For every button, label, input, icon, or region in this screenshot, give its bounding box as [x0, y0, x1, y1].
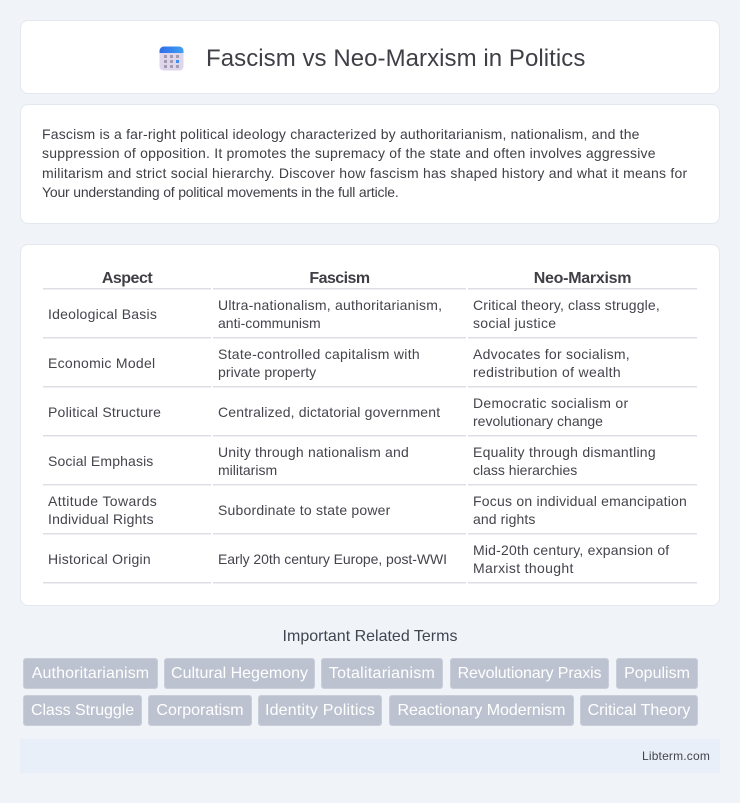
footer credit: Libterm.com: [642, 749, 710, 763]
row: Economic Model: Economic Model: [48, 355, 155, 371]
row: Attitude Towards Individual Rights: Attitude Towards: [48, 493, 157, 509]
row: Ideological Basis: [48, 297, 660, 331]
title: Fascism vs Neo-Marxism in Politics: [206, 45, 585, 72]
row: Social Emphasis: [48, 444, 656, 478]
row: Historical Origin: Early 20th century Europe, post-WWI: [218, 551, 447, 567]
panel: comparison table: [20, 244, 720, 606]
intro text: militarism and strict social hierarchy. Discover how fascism has shaped history and what it means for: [42, 165, 687, 181]
intro text: Fascism is a far-right political ideology characterized by authoritarianism, nationalism, and the: [42, 126, 640, 142]
row: Historical Origin: Historical Origin: [48, 551, 151, 567]
row: Economic Model: State-controlled capitalism with: [218, 346, 420, 362]
row: Political Structure: revolutionary change: [473, 413, 603, 429]
row: Attitude Towards Individual Rights: Individual Rights: [48, 511, 154, 527]
row: Social Emphasis: class hierarchies: [473, 462, 577, 478]
tag group: related terms: Authoritarianism: [32, 665, 149, 682]
row: Economic Model: [48, 346, 630, 380]
tag group: related terms: Cultural Hegemony: [171, 665, 308, 682]
row: Ideological Basis: Ultra-nationalism, authoritarianism,: [218, 297, 442, 313]
tag group: related terms: Revolutionary Praxis: [458, 665, 601, 682]
row: Economic Model: redistribution of wealth: [473, 364, 621, 380]
row: Historical Origin: Mid-20th century, expansion of: [473, 542, 669, 558]
row: Social Emphasis: Social Emphasis: [48, 453, 153, 469]
row: Social Emphasis: Unity through nationalism and: [218, 444, 409, 460]
row: Political Structure: [48, 395, 628, 429]
tag group: related terms: Totalitarianism: [329, 665, 435, 682]
row: Ideological Basis: social justice: [473, 315, 556, 331]
row: Historical Origin: Marxist thought: [473, 560, 574, 576]
row: Political Structure: Democratic socialism or: [473, 395, 628, 411]
tag group: related terms: [23, 658, 698, 726]
tag group: related terms: Populism: [624, 665, 690, 682]
panel: introduction: [20, 104, 720, 224]
row: Political Structure: Political Structure: [48, 404, 161, 420]
tag group: related terms: Reactionary Modernism: [398, 702, 565, 719]
row: Attitude Towards Individual Rights: Focus on individual emancipation: [473, 493, 687, 509]
tag group: related terms: Critical Theory: [588, 702, 690, 719]
row: Social Emphasis: militarism: [218, 462, 277, 478]
row: Economic Model: Advocates for socialism,: [473, 346, 630, 362]
heading: related terms: Important Related Terms: [283, 628, 457, 645]
row: Ideological Basis: Critical theory, class struggle,: [473, 297, 660, 313]
row: Ideological Basis: anti-communism: [218, 315, 321, 331]
table header: Aspect: [102, 270, 152, 287]
table header: Fascism: [309, 270, 370, 287]
row: Political Structure: Centralized, dictatorial government: [218, 404, 440, 420]
intro text: Your understanding of political movements in the full article.: [42, 184, 399, 200]
tag group: related terms: Class Struggle: [31, 702, 134, 719]
row: Attitude Towards Individual Rights: and rights: [473, 511, 535, 527]
row: Ideological Basis: Ideological Basis: [48, 306, 157, 322]
row: Historical Origin: [48, 542, 670, 576]
icon: calendar: [160, 46, 184, 70]
row: Social Emphasis: Equality through dismantling: [473, 444, 656, 460]
tag group: related terms: Identity Politics: [265, 702, 375, 719]
tag group: related terms: Corporatism: [156, 702, 244, 719]
table header: Neo-Marxism: [534, 270, 631, 287]
intro text: [42, 126, 687, 200]
table header: [102, 270, 631, 287]
intro text: suppression of opposition. It promotes the supremacy of the state and often involves aggressive: [42, 145, 656, 161]
row: Attitude Towards Individual Rights: Subordinate to state power: [218, 502, 391, 518]
row: Economic Model: private property: [218, 364, 316, 380]
footer bar: [20, 739, 720, 773]
row: Attitude Towards Individual Rights: [48, 493, 687, 527]
panel: title card: [20, 20, 720, 94]
